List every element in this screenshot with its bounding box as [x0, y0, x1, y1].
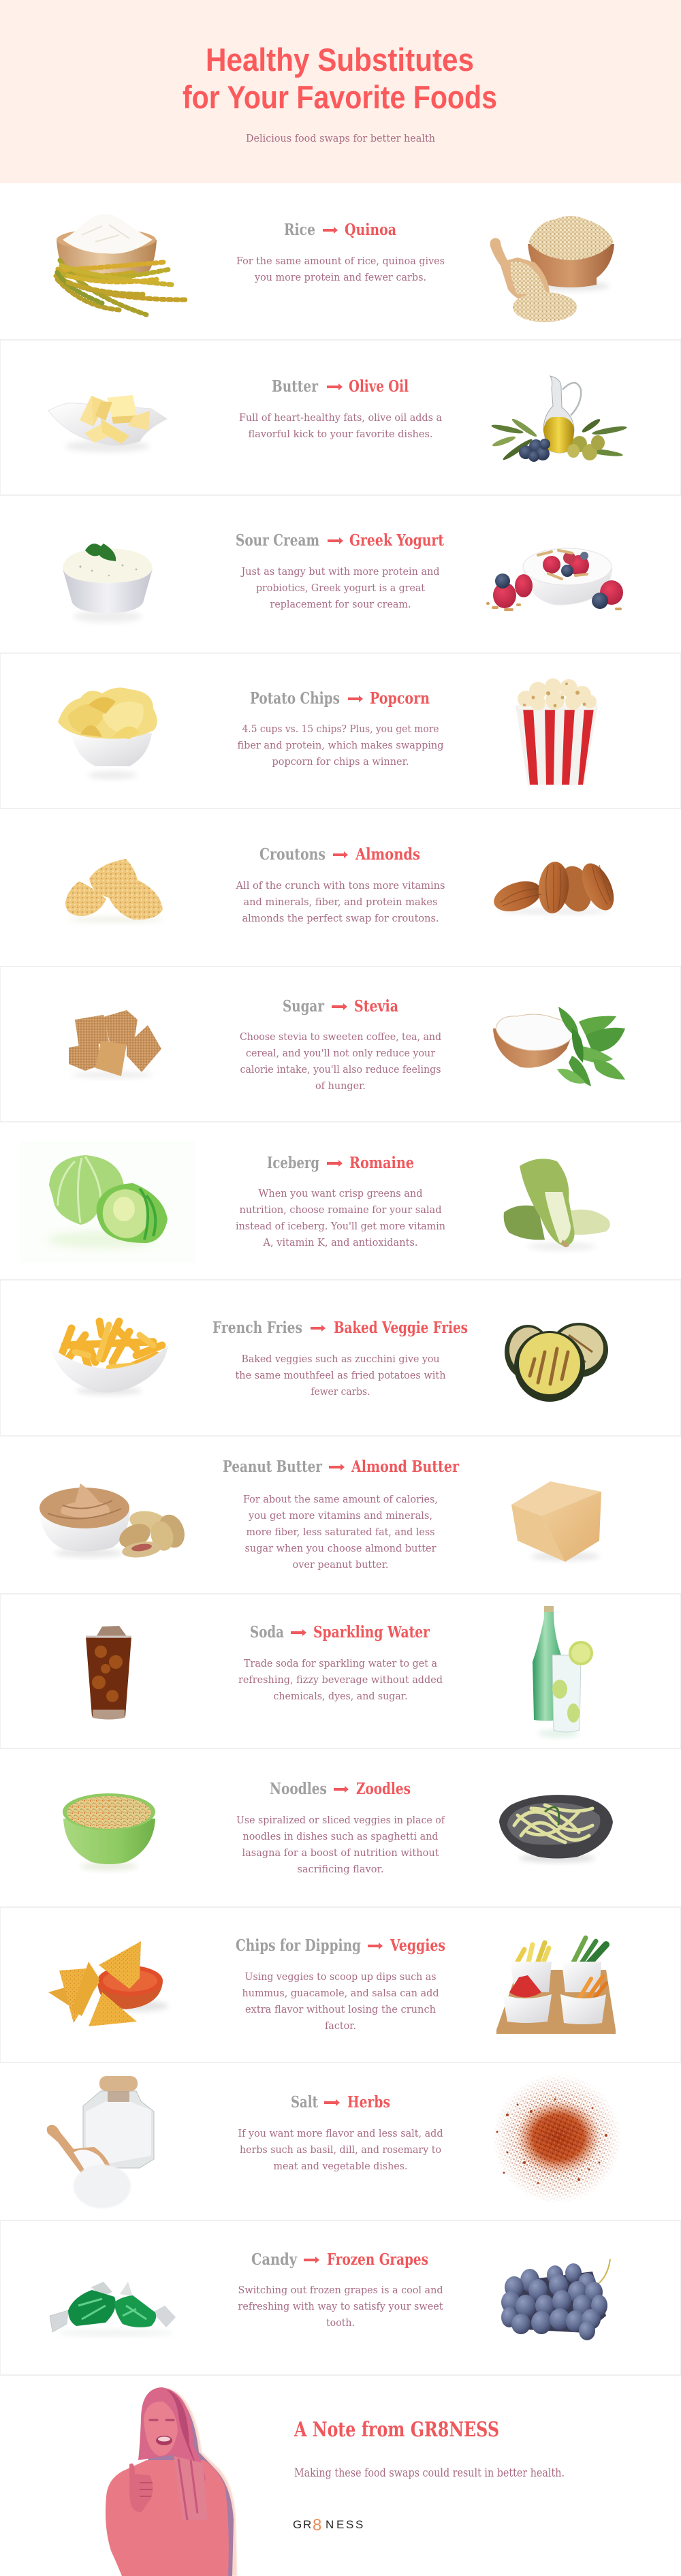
- body text: [239, 411, 442, 440]
- body text: factor.: [325, 2020, 356, 2032]
- panel: peanut butter to almond butter: [39, 1458, 601, 1571]
- heading: Chips for Dipping: [236, 1936, 361, 1955]
- heading: [284, 221, 396, 239]
- body text: All of the crunch with tons more vitamins: [236, 879, 445, 892]
- panel: french fries to baked veggie fries: [50, 1319, 608, 1402]
- heading: [291, 2093, 390, 2111]
- body text: [240, 1031, 441, 1092]
- heading: Stevia: [354, 997, 398, 1016]
- panel: potato chips to popcorn: [58, 678, 597, 785]
- panel: note from GR8NESS: [106, 2387, 565, 2576]
- icon: veggie sticks in cups on board: [496, 1938, 616, 2034]
- logo: GRNESS: [293, 2518, 363, 2531]
- heading: [236, 531, 444, 550]
- body text: hummus, guacamole, and salsa can add: [242, 1987, 439, 1999]
- title: Healthy Substitutes: [206, 42, 474, 78]
- body text: extra flavor without losing the crunch: [245, 2003, 436, 2015]
- title: for Your Favorite Foods: [183, 79, 497, 115]
- heading: Potato Chips: [250, 689, 340, 708]
- subtitle: Delicious food swaps for better health: [246, 132, 435, 144]
- body text: cereal, and you'll not only reduce your: [246, 1047, 436, 1059]
- icon: bowl of french fries: [50, 1321, 168, 1395]
- body text: Making these food swaps could result in better health.: [294, 2466, 565, 2480]
- icon: brown sugar cubes: [69, 1010, 161, 1078]
- panel: sour cream to greek yogurt: [63, 531, 623, 623]
- heading: Zoodles: [356, 1780, 411, 1798]
- heading: Peanut Butter: [223, 1458, 323, 1476]
- body text: sugar when you choose almond butter: [245, 1542, 437, 1554]
- heading: [267, 1154, 414, 1172]
- heading: Popcorn: [370, 689, 430, 708]
- body text: Use spiralized or sliced veggies in place of: [236, 1814, 445, 1826]
- body text: [242, 1970, 439, 2032]
- body text: [238, 2127, 443, 2172]
- body text: the same mouthfeel as fried potatoes with: [236, 1369, 446, 1381]
- body text: [236, 879, 445, 924]
- body text: refreshing, fizzy beverage without added: [238, 1674, 443, 1686]
- body text: [237, 723, 444, 768]
- body text: instead of iceberg. You'll get more vitamin: [236, 1220, 445, 1232]
- body text: herbs such as basil, dill, and rosemary to: [240, 2143, 441, 2156]
- body text: Baked veggies such as zucchini give you: [241, 1353, 440, 1365]
- icon: sparkling water bottle and glass: [533, 1606, 593, 1738]
- icon: green wrapped candies: [50, 2282, 176, 2336]
- icon: rice bowl with stalks: [56, 214, 185, 315]
- figure: smiling woman giving thumbs up: [106, 2387, 237, 2576]
- body text: Choose stevia to sweeten coffee, tea, and: [240, 1031, 441, 1043]
- heading: Iceberg: [267, 1154, 319, 1172]
- icon: tortilla chips with salsa: [48, 1941, 168, 2026]
- heading: Candy: [251, 2250, 298, 2269]
- body text: Using veggies to scoop up dips such as: [245, 1970, 436, 1983]
- icon: bowl of zoodles: [499, 1795, 613, 1862]
- icon: quinoa bowl and scoop: [490, 216, 614, 322]
- icon: green bowl of noodles: [63, 1793, 155, 1870]
- icon: greek yogurt with berries: [488, 548, 623, 610]
- body text: tooth.: [326, 2316, 355, 2329]
- body text: Switching out frozen grapes is a cool and: [238, 2284, 443, 2296]
- body text: you more protein and fewer carbs.: [254, 271, 426, 283]
- heading: Romaine: [349, 1154, 414, 1172]
- body text: calorie intake, you'll also reduce feelings: [240, 1063, 441, 1075]
- heading: Salt: [291, 2093, 318, 2111]
- body text: [236, 1187, 445, 1248]
- heading: Butter: [272, 377, 319, 396]
- panel: iceberg to romaine: [20, 1141, 610, 1263]
- icon: ramekin of sour cream: [63, 544, 153, 623]
- heading: Quinoa: [345, 221, 396, 239]
- body text: refreshing with way to satisfy your sweet: [238, 2300, 443, 2312]
- body text: [238, 2284, 443, 2329]
- heading: Baked Veggie Fries: [334, 1319, 468, 1337]
- icon: almonds: [490, 858, 620, 917]
- body text: Just as tangy but with more protein and: [240, 565, 440, 578]
- heading: [270, 1780, 411, 1798]
- body text: meat and vegetable dishes.: [274, 2160, 407, 2172]
- heading: Almonds: [355, 845, 420, 864]
- icon: salt jar and scoop: [47, 2076, 154, 2208]
- body text: Trade soda for sparkling water to get a: [244, 1657, 437, 1669]
- body text: Full of heart-healthy fats, olive oil adds a: [239, 411, 442, 424]
- heading: [212, 1319, 468, 1337]
- body text: If you want more flavor and less salt, add: [238, 2127, 443, 2139]
- body text: 4.5 cups vs. 15 chips? Plus, you get more: [242, 723, 439, 735]
- body text: over peanut butter.: [293, 1558, 388, 1571]
- body text: popcorn for chips a winner.: [272, 755, 409, 768]
- heading: Greek Yogurt: [349, 531, 444, 550]
- heading: Herbs: [347, 2093, 390, 2111]
- icon: romaine lettuce: [504, 1159, 610, 1251]
- body text: you get more vitamins and minerals,: [248, 1509, 432, 1522]
- panel: salt to herbs: [47, 2074, 622, 2208]
- body text: fiber and protein, which makes swapping: [237, 739, 444, 751]
- body text: [236, 1814, 445, 1875]
- body text: sacrificing flavor.: [297, 1863, 384, 1875]
- body text: noodles in dishes such as spaghetti and: [242, 1830, 439, 1842]
- heading: Soda: [250, 1623, 284, 1642]
- body text: fewer carbs.: [311, 1385, 370, 1398]
- body text: and minerals, fiber, and protein makes: [244, 896, 437, 908]
- heading: Sparkling Water: [313, 1623, 430, 1642]
- heading: Olive Oil: [349, 377, 409, 396]
- body text: probiotics, Greek yogurt is a great: [256, 582, 425, 594]
- heading: [251, 2250, 428, 2269]
- panel: chips for dipping to veggies: [48, 1936, 616, 2034]
- heading: Sugar: [283, 997, 325, 1016]
- body text: A, vitamin K, and antioxidants.: [263, 1236, 418, 1248]
- icon: glass of soda: [86, 1626, 131, 1719]
- body text: [243, 1493, 438, 1571]
- logo: 8: [313, 2516, 321, 2534]
- header band: [0, 0, 681, 183]
- icon: almond butter cube: [511, 1481, 601, 1562]
- body text: of hunger.: [315, 1080, 366, 1092]
- icon: potato chips in bowl: [58, 688, 157, 779]
- panel: croutons to almonds: [65, 845, 620, 924]
- heading: Croutons: [259, 845, 326, 864]
- panel: soda to sparkling water: [86, 1606, 593, 1738]
- icon: butter on plate: [48, 395, 167, 452]
- panel: noodles to zoodles: [63, 1780, 613, 1875]
- icon: bunch of grapes: [501, 2259, 610, 2340]
- body text: [236, 255, 445, 283]
- heading: Almond Butter: [351, 1458, 460, 1476]
- body text: For about the same amount of calories,: [243, 1493, 438, 1505]
- body text: [238, 1657, 443, 1702]
- icon: peanut butter bowl and peanuts: [39, 1483, 189, 1560]
- heading: French Fries: [212, 1319, 302, 1337]
- panel: sugar to stevia: [69, 997, 625, 1092]
- heading: [259, 845, 420, 864]
- body text: lasagna for a boost of nutrition without: [242, 1847, 439, 1859]
- body text: more fiber, less saturated fat, and less: [247, 1526, 434, 1538]
- panel: rice to quinoa: [56, 214, 614, 322]
- body text: When you want crisp greens and: [259, 1187, 423, 1199]
- heading: [272, 377, 409, 396]
- heading: [250, 689, 430, 708]
- panel: candy to frozen grapes: [50, 2250, 610, 2340]
- body text: almonds the perfect swap for croutons.: [242, 912, 439, 924]
- body text: nutrition, choose romaine for your salad: [240, 1204, 442, 1216]
- icon: ground herbs and spices: [494, 2076, 620, 2201]
- panel: butter to olive oil: [48, 376, 627, 462]
- icon: iceberg lettuce: [20, 1141, 195, 1263]
- heading: Sour Cream: [236, 531, 319, 550]
- icon: croutons: [65, 859, 163, 923]
- heading: Rice: [284, 221, 315, 239]
- body text: flavorful kick to your favorite dishes.: [248, 428, 433, 440]
- heading: Noodles: [270, 1780, 327, 1798]
- heading: [283, 997, 398, 1016]
- heading: [250, 1623, 430, 1642]
- title: [183, 42, 497, 115]
- icon: grilled zucchini: [505, 1323, 608, 1402]
- body text: [240, 565, 440, 610]
- icon: olive oil bottle and olives: [491, 376, 627, 462]
- heading: [223, 1458, 460, 1476]
- icon: stevia bowl and leaves: [493, 1007, 625, 1086]
- body text: replacement for sour cream.: [270, 598, 411, 610]
- heading: Veggies: [390, 1936, 445, 1955]
- heading: Frozen Grapes: [327, 2250, 428, 2269]
- body text: For the same amount of rice, quinoa gives: [236, 255, 445, 267]
- icon: popcorn bucket: [516, 678, 597, 785]
- heading: A Note from GR8NESS: [294, 2418, 499, 2442]
- body text: chemicals, dyes, and sugar.: [274, 1690, 407, 1702]
- body text: [236, 1353, 446, 1398]
